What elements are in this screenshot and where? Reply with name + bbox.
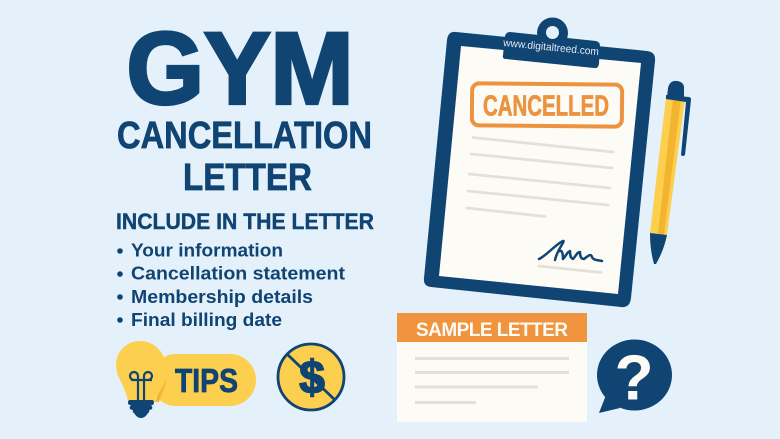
bullet list: Your information (131, 240, 283, 260)
icon: no dollar sign: $ (299, 351, 325, 403)
signature (539, 241, 602, 261)
icon: question speech bubble: ? (614, 342, 654, 414)
bullet list: Cancellation statement (131, 264, 345, 284)
icon: tips lightbulb badge (116, 341, 256, 418)
sample letter header (397, 313, 587, 342)
pen (650, 81, 691, 264)
icon: no dollar sign (278, 344, 344, 410)
icon: question speech bubble (597, 340, 672, 414)
cancelled stamp (472, 83, 622, 127)
paper sheet (439, 46, 641, 294)
cancelled stamp: CANCELLED (483, 90, 609, 122)
subtitle: Cancellation Letter (117, 115, 372, 199)
bullet list: Membership details (131, 287, 313, 307)
panel: sample letter: SAMPLE LETTER (416, 320, 568, 341)
clipboard (424, 18, 655, 307)
bullet list: Final billing date (131, 310, 282, 330)
heading: include in the letter: INCLUDE IN THE LETTER (116, 209, 374, 234)
bullet list (117, 240, 345, 330)
clip url text: www.digitaltreed.com (502, 37, 600, 58)
title: GYM: GYM (126, 12, 354, 126)
sample letter lines (415, 357, 569, 404)
icon: tips lightbulb badge: TIPS (175, 362, 238, 399)
subtitle: Cancellation Letter: CANCELLATION (117, 115, 372, 157)
subtitle: Cancellation Letter: LETTER (183, 157, 312, 199)
letter text lines (467, 138, 613, 272)
clipboard board (424, 32, 655, 307)
panel: sample letter (397, 313, 587, 422)
clip (503, 18, 600, 68)
